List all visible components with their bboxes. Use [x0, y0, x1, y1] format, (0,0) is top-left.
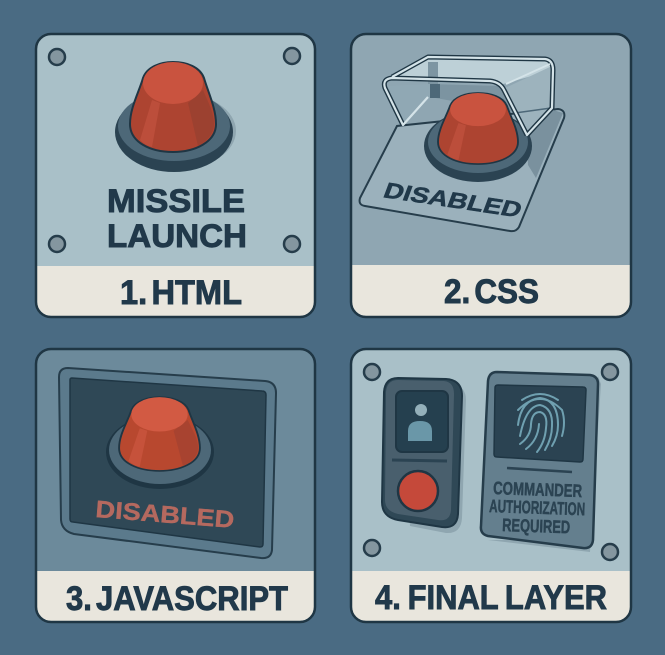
panel: 1. HTML: [36, 34, 315, 317]
footer: 1. HTML: 1. HTML: [120, 274, 242, 312]
fingerprint screen: [494, 385, 586, 462]
label: missile launch: LAUNCH: [107, 218, 247, 254]
icon: red button: [106, 397, 214, 489]
icon: red button: [424, 93, 532, 182]
icon: clear safety cover, front edges: [384, 57, 553, 135]
label: commander authorization required: AUTHORIZATION: [489, 496, 585, 519]
recessed frame: [59, 368, 276, 558]
footer: 4. Final layer: [352, 571, 630, 621]
footer: 1. HTML: [37, 266, 314, 316]
label: commander authorization required: REQUIRED: [502, 515, 571, 537]
rivets: [364, 364, 618, 560]
tilted plate: [360, 109, 564, 231]
icon: clear safety cover, rear faces: [387, 57, 553, 135]
panel: 4. Final layer: [351, 349, 631, 622]
label: commander authorization required: COMMANDER: [493, 478, 583, 501]
footer: 3. JavaScript: [37, 571, 314, 621]
red button: [398, 471, 438, 511]
icon: red launch button: [115, 62, 236, 172]
screen: person icon: [396, 391, 448, 452]
footer: 4. Final layer: 4. FINAL LAYER: [375, 579, 607, 617]
label: missile launch: MISSILE: [107, 183, 245, 219]
dark recess: [70, 378, 266, 547]
label: disabled: DISABLED: [95, 496, 235, 534]
panel: 3. JavaScript: [36, 349, 315, 622]
footer: 3. JavaScript: 3. JAVASCRIPT: [66, 580, 288, 618]
footer: 2. CSS: 2. CSS: [444, 273, 539, 311]
panel: 2. CSS: [351, 34, 631, 317]
rivets: [49, 48, 300, 252]
label: missile launch: [107, 183, 247, 254]
shadow on plate: [527, 110, 563, 178]
label: commander authorization required: [489, 478, 585, 537]
label: disabled: DISABLED: [380, 178, 526, 222]
device: fingerprint authorization: [481, 372, 601, 552]
footer: 2. CSS: [352, 265, 630, 316]
device: id and button: [382, 378, 466, 533]
